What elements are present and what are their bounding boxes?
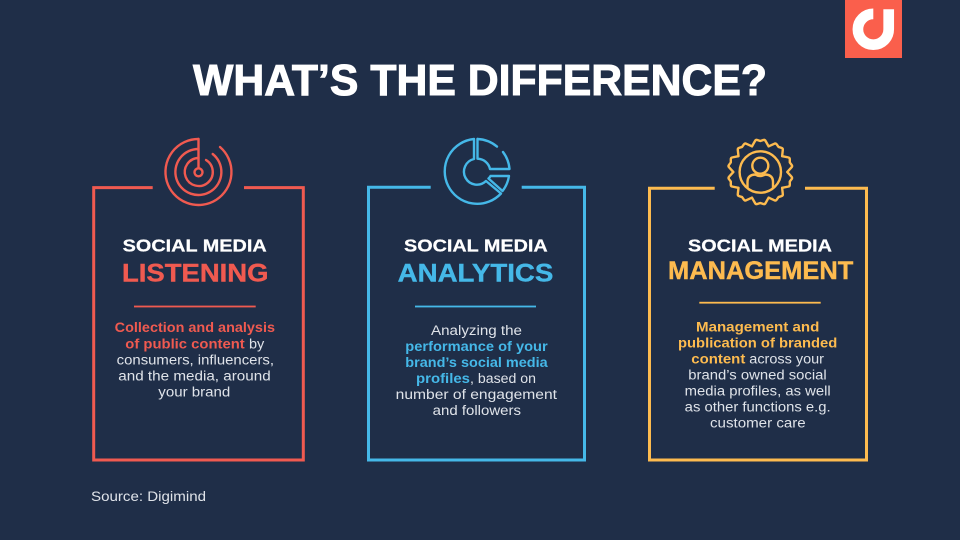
text block: management description: customer care: [710, 415, 806, 430]
text block: listening description: of public content: [125, 336, 245, 351]
text block: management description: Management and: [696, 319, 819, 334]
panel frame: analytics: [368, 187, 584, 460]
text block: management description: [678, 319, 837, 430]
text block: listening description: consumers, influencers,: [117, 352, 274, 367]
heading: management: SOCIAL MEDIA: [688, 236, 832, 256]
heading: analytics: SOCIAL MEDIA: [404, 236, 548, 256]
heading: listening: LISTENING: [122, 260, 268, 288]
icon: donut chart: [445, 139, 510, 204]
text block: listening description: your brand: [158, 384, 230, 399]
heading: management: MANAGEMENT: [668, 257, 853, 285]
text block: management description: as other functions e.g.: [685, 399, 831, 414]
icon: gear with person: [727, 140, 793, 204]
text block: management description: across your: [749, 351, 825, 366]
text block: management description: publication of branded: [678, 335, 837, 350]
text block: analytics description: number of engagement: [396, 387, 557, 402]
text block: management description: content: [691, 351, 746, 366]
heading: management: [668, 236, 853, 285]
panel: social media management: [650, 140, 866, 460]
panel frame: management: [650, 188, 866, 460]
text block: analytics description: profiles: [416, 371, 470, 386]
heading: analytics: [398, 236, 553, 288]
heading: listening: SOCIAL MEDIA: [123, 236, 267, 256]
text block: management description: media profiles, as well: [685, 383, 831, 398]
text block: analytics description: brand’s social media: [405, 355, 548, 370]
heading: listening: [122, 236, 268, 288]
panel frame: listening: [94, 188, 303, 460]
title: WHAT’S THE DIFFERENCE?: [193, 56, 767, 105]
text block: listening description: [115, 320, 275, 399]
text block: analytics description: performance of your: [405, 339, 549, 354]
text block: listening description: and the media, around: [118, 368, 271, 383]
text block: listening description: by: [249, 336, 265, 351]
icon: radar: [165, 139, 231, 205]
text block: management description: brand’s owned social: [688, 367, 827, 382]
text block: listening description: Collection and analysis: [115, 320, 275, 335]
source note: Source: Digimind: [91, 489, 206, 504]
text block: analytics description: and followers: [433, 403, 521, 418]
panel: social media analytics: [368, 139, 584, 460]
text block: analytics description: , based on: [470, 371, 536, 386]
text block: analytics description: [396, 323, 557, 418]
text block: analytics description: Analyzing the: [431, 323, 522, 338]
panel: social media listening: [94, 139, 303, 460]
heading: analytics: ANALYTICS: [398, 260, 553, 288]
logo: [845, 0, 902, 58]
